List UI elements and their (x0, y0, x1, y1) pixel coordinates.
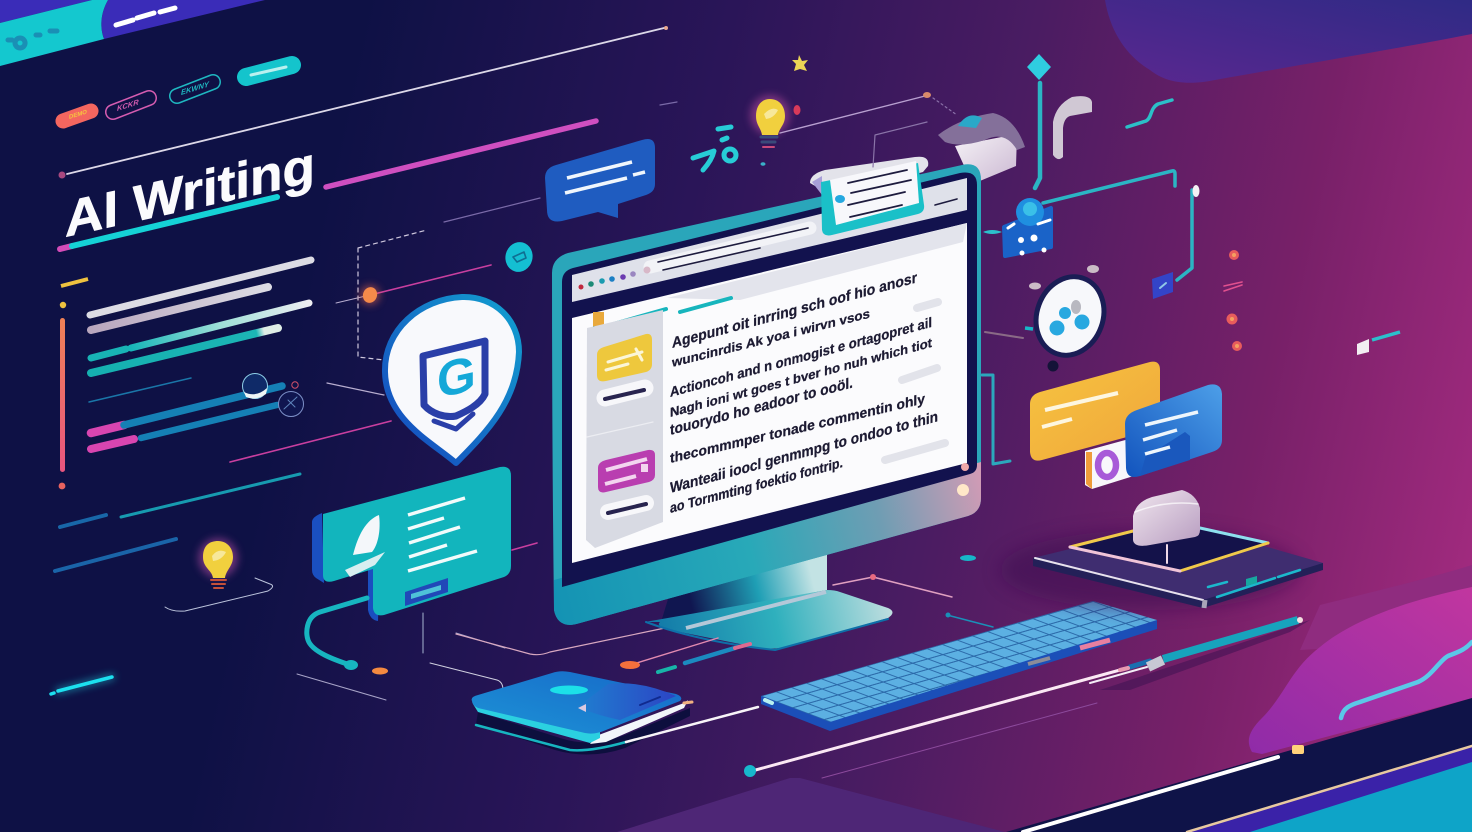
icon: purple tile (598, 450, 655, 492)
monitor stand (645, 545, 892, 650)
status dots (1224, 250, 1242, 351)
pad indicator lights (1208, 570, 1300, 597)
icon: star (792, 55, 808, 71)
vertical progress rail (59, 302, 66, 489)
white document screen (572, 223, 967, 563)
document text: Actioncoh and n onmogist e ortagopret ail (670, 315, 932, 401)
icon: quill feather (345, 515, 385, 577)
icon: shield (423, 341, 485, 417)
top-left browser banner (0, 0, 265, 66)
grey hook (1053, 96, 1092, 159)
tag: coral (63, 109, 91, 121)
pink rule (326, 121, 596, 187)
sidebar pill one (605, 388, 645, 399)
top-right purple blob (1105, 0, 1472, 83)
alarm clock badge (985, 265, 1115, 372)
drawing pad frame (1070, 528, 1268, 571)
tag: pink outline: KCKR (117, 97, 139, 113)
dome stylus holder (1133, 490, 1200, 546)
window dots (578, 266, 650, 290)
document text (670, 270, 938, 517)
right teal circuit lines (982, 83, 1200, 464)
white tile (1085, 436, 1140, 489)
bottom-right diagonal bands (1006, 698, 1472, 832)
card text lines (408, 498, 477, 571)
tag: teal filled (246, 65, 292, 77)
icon: lightbulb left (198, 538, 238, 588)
tag: teal outline: EKWNY (181, 79, 210, 97)
yellow card (1030, 362, 1160, 461)
title: AI Writing (65, 135, 315, 248)
tab markers (593, 298, 731, 335)
monitor (552, 164, 981, 650)
document text: touorydo ho eadoor to ooöl. (670, 375, 853, 439)
document text: Nagh ioni wt goes t bver ho nuh which tiot (670, 335, 933, 420)
tag: pink outline (113, 97, 149, 113)
document text: Agepunt oit inrring sch oof hio anosr (672, 270, 917, 352)
lines near stand (833, 555, 993, 627)
white cable and dashes (476, 638, 758, 750)
pill tags (63, 65, 292, 121)
icon: cyan glowing dash (51, 677, 112, 694)
cable with node (307, 598, 388, 674)
icon: lightbulb top (750, 95, 790, 147)
icon: cyan diamond (1027, 54, 1051, 80)
address bar (650, 228, 810, 270)
dial icon (278, 382, 304, 416)
letter G: G (437, 344, 476, 409)
bottom-right blob with cyan trace (1249, 565, 1472, 754)
bulb connector and pointers (760, 92, 957, 167)
corner lights (957, 463, 969, 496)
monitor navy bezel (562, 172, 977, 587)
top thin rule (58, 26, 668, 178)
pinned note card (810, 157, 928, 235)
robot dice icon (983, 198, 1051, 256)
thin rule beside monitor (444, 102, 677, 222)
card button (405, 578, 448, 606)
keyboard (761, 601, 1157, 731)
magnifier bubble (242, 374, 268, 398)
sidebar (586, 310, 663, 548)
connector lines left (165, 230, 665, 700)
blue card (1125, 384, 1222, 477)
icon: yellow tile (597, 334, 652, 381)
monitor chin (554, 462, 981, 625)
browser bar (572, 178, 967, 302)
grey placeholder pills (885, 302, 945, 460)
icon: blue chip (1152, 272, 1173, 299)
stylus pen (1090, 617, 1310, 690)
icon: teal circle (502, 239, 536, 275)
white dome hat device (938, 113, 1025, 183)
document text: thecommmper tonade commentin ohly (670, 391, 925, 467)
long pointer line (744, 670, 1120, 778)
bottom-centre floor panel (617, 778, 1005, 832)
shield pin badge (385, 297, 519, 463)
sidebar pill two (608, 503, 646, 513)
monitor body (552, 164, 981, 625)
left text bars (55, 260, 311, 571)
tag: coral: DEMO (69, 109, 87, 121)
drawing tablet platform (1000, 490, 1323, 610)
tablet notebook (472, 671, 692, 755)
yellow and blue message cards (1030, 362, 1222, 489)
tablet pen (577, 683, 676, 720)
document text: wuncinrdis Ak yoa i wirvn vsos (671, 306, 870, 370)
icon: shield chevron (434, 414, 473, 429)
document text: ao Tormmting foektio fontrip. (670, 455, 843, 517)
document text: Wanteaii ioocl genmmpg to ondoo to thin (670, 408, 938, 497)
icon: orange node (360, 285, 380, 305)
icon: teal glyph marks (693, 127, 736, 170)
speech bubble blue (545, 139, 655, 222)
white tag with teal line (1357, 332, 1400, 355)
panel: teal writing card (312, 467, 511, 621)
